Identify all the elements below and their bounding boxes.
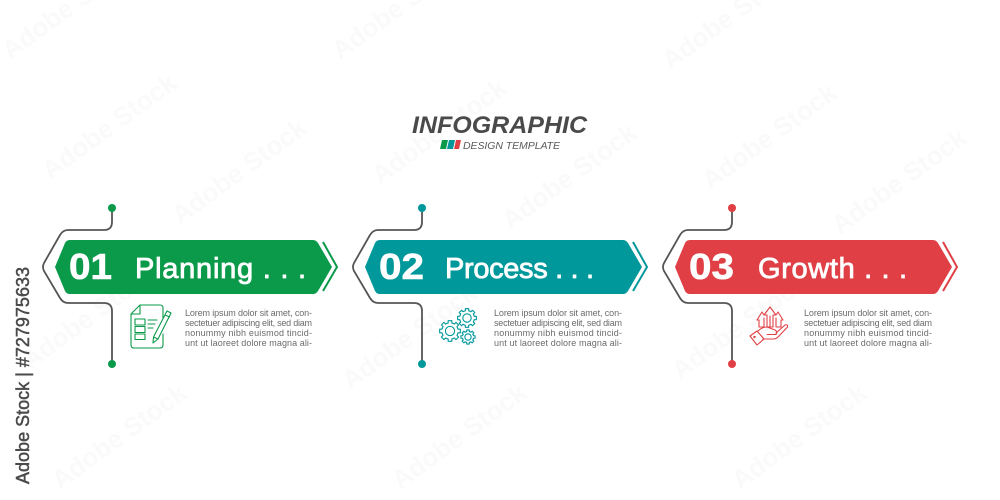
colour slashes (440, 140, 461, 149)
background watermark: Adobe Stock (166, 112, 313, 230)
stock credit: Adobe Stock | #727975633 (13, 267, 33, 484)
number: 01 (69, 246, 112, 287)
panel: 01 planning (43, 204, 337, 368)
background watermark: Adobe Stock (496, 117, 643, 235)
background watermark: Adobe Stock (366, 72, 513, 190)
text block: unt ut laoreet dolore magna ali- (804, 338, 932, 348)
number: 02 (379, 246, 424, 287)
text block: Lorem ipsum dolor sit amet, con- (804, 308, 932, 318)
background watermark: Adobe Stock (46, 377, 193, 495)
banner (675, 240, 952, 294)
connector line (353, 209, 422, 364)
chevron (323, 242, 337, 291)
chevron (633, 242, 647, 291)
text block: unt ut laoreet dolore magna ali- (185, 338, 312, 348)
banner (55, 240, 332, 294)
icon: gears (440, 309, 476, 344)
heading: Growth . . . (758, 253, 907, 285)
text block: Lorem ipsum dolor sit amet, con- (494, 308, 622, 318)
text block: sectetuer adipiscing elit, sed diam (494, 318, 622, 328)
bottom dot (108, 360, 116, 368)
text block (185, 308, 312, 348)
connector line (43, 209, 112, 364)
panel: 02 process (353, 204, 647, 368)
title (412, 112, 588, 152)
background watermark: Adobe Stock (826, 122, 973, 240)
number: 03 (689, 246, 734, 287)
banner (365, 240, 642, 294)
background watermark: Adobe Stock (666, 267, 813, 385)
heading: infographic: INFOGRAPHIC (412, 112, 588, 139)
background watermark: Adobe Stock (16, 257, 163, 375)
heading: Planning . . . (135, 253, 306, 285)
text block (494, 308, 622, 348)
background watermark: Adobe Stock (696, 77, 843, 195)
panel: 03 growth (663, 204, 957, 368)
text block (804, 308, 932, 348)
connector line (663, 209, 732, 364)
text block: nonummy nibh euismod tincid- (185, 328, 312, 338)
background watermark: Adobe Stock (726, 377, 873, 495)
text block: unt ut laoreet dolore magna ali- (494, 338, 622, 348)
text block: nonummy nibh euismod tincid- (494, 328, 622, 338)
top dot (418, 204, 426, 212)
bottom dot (418, 360, 426, 368)
text block: sectetuer adipiscing elit, sed diam (804, 318, 932, 328)
background watermark: Adobe Stock (386, 377, 533, 495)
text block: Lorem ipsum dolor sit amet, con- (185, 308, 312, 318)
icon: hand with rising arrows (750, 307, 788, 345)
subtitle: DESIGN TEMPLATE (463, 140, 561, 152)
icon: document and pencil (131, 305, 171, 348)
text block: nonummy nibh euismod tincid- (804, 328, 932, 338)
top dot (108, 204, 116, 212)
heading: Process . . . (445, 253, 594, 285)
text block: sectetuer adipiscing elit, sed diam (185, 318, 312, 328)
bottom dot (728, 360, 736, 368)
chevron (943, 242, 957, 291)
top dot (728, 204, 736, 212)
background watermark: Adobe Stock (336, 277, 483, 395)
background watermark: Adobe Stock (36, 67, 183, 185)
